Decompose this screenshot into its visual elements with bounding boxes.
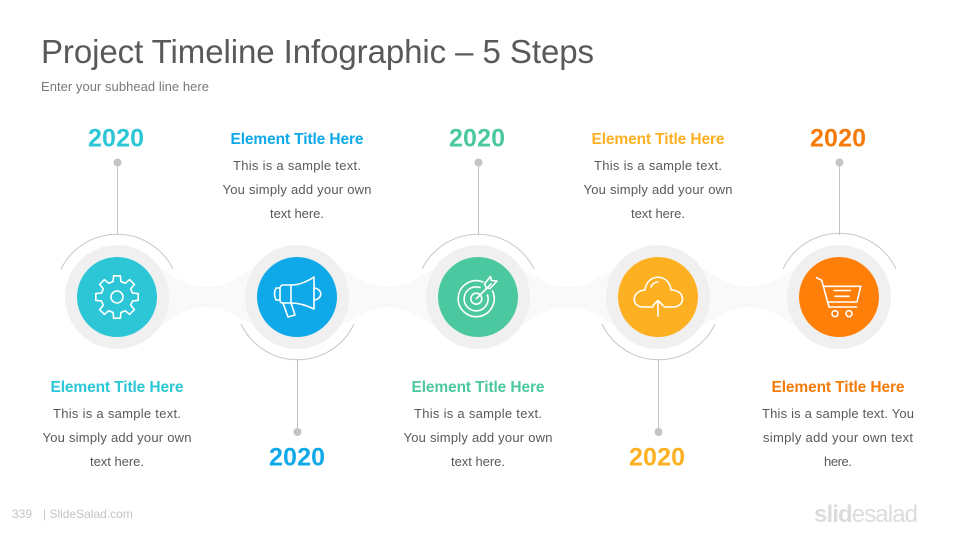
step 2 body	[222, 158, 372, 221]
step 4 body: You simply add your own	[584, 182, 732, 197]
step 2 arc	[241, 324, 354, 360]
step 5 body	[762, 406, 914, 469]
step 2 title: Element Title Here	[230, 131, 364, 148]
step 1 title: Element Title Here	[50, 379, 184, 396]
step 1 arc	[61, 234, 173, 269]
step 4 arc	[602, 324, 715, 360]
subhead: Enter your subhead line here	[41, 79, 209, 94]
step 3 disc	[438, 257, 518, 337]
step 1 body: You simply add your own	[42, 430, 192, 445]
step 5 body: This is a sample text. You	[762, 406, 914, 421]
step 3 body	[404, 406, 552, 469]
step 3	[404, 124, 552, 469]
step 3 arc	[422, 234, 534, 269]
icon: megaphone	[274, 277, 321, 317]
step 3 year: 2020	[449, 124, 505, 152]
step 2 body: You simply add your own	[222, 182, 372, 197]
step 2 disc	[257, 257, 337, 337]
icon: target	[458, 276, 497, 317]
step 3 title: Element Title Here	[412, 379, 545, 396]
step 2 year: 2020	[269, 444, 325, 472]
icon: shopping cart	[816, 278, 861, 317]
step 4 pin line	[654, 359, 662, 436]
step 3 pin line	[474, 158, 482, 235]
connector ribbon	[160, 268, 796, 326]
step 1 year: 2020	[88, 124, 144, 152]
step 5 year: 2020	[810, 124, 866, 152]
step 2 pin line	[294, 359, 302, 436]
step 2 body: text here.	[270, 206, 324, 221]
step 2	[222, 131, 372, 472]
step 4 disc	[618, 257, 698, 337]
step 1 body: This is a sample text.	[53, 406, 181, 421]
footer page number and site: 339	[12, 507, 32, 521]
step 4	[584, 131, 732, 472]
step 5 disc	[799, 257, 879, 337]
step 4 body	[584, 158, 732, 221]
step 4 body: text here.	[631, 206, 685, 221]
icon: cloud upload	[634, 277, 683, 316]
step 3 body: This is a sample text.	[414, 406, 542, 421]
step 4 title: Element Title Here	[592, 131, 725, 148]
step 3 body: text here.	[451, 454, 505, 469]
footer logo: slidesalad	[814, 501, 918, 528]
step 4 body: This is a sample text.	[594, 158, 722, 173]
title: Project Timeline Infographic – 5 Steps	[41, 33, 594, 70]
step 5 pin line	[836, 158, 844, 235]
footer page number and site: | SlideSalad.com	[43, 507, 133, 521]
step 5 halo	[787, 245, 891, 349]
step 1	[42, 124, 192, 469]
step 5 body: here.	[824, 454, 852, 469]
icon: gear	[96, 276, 138, 318]
step 1 disc	[77, 257, 157, 337]
step 1 body	[42, 406, 192, 469]
step 3 body: You simply add your own	[404, 430, 552, 445]
step 2 body: This is a sample text.	[233, 158, 361, 173]
step 1 body: text here.	[90, 454, 144, 469]
step 5	[762, 124, 914, 469]
step 3 halo	[426, 245, 530, 349]
step 5 body: simply add your own text	[763, 430, 913, 445]
step 2 halo	[245, 245, 349, 349]
step 4 halo	[606, 245, 710, 349]
step 5 title: Element Title Here	[772, 379, 905, 396]
step 1 pin line	[114, 158, 122, 235]
step 5 arc	[783, 233, 896, 269]
step 4 year: 2020	[629, 444, 685, 472]
step 1 halo	[65, 245, 169, 349]
